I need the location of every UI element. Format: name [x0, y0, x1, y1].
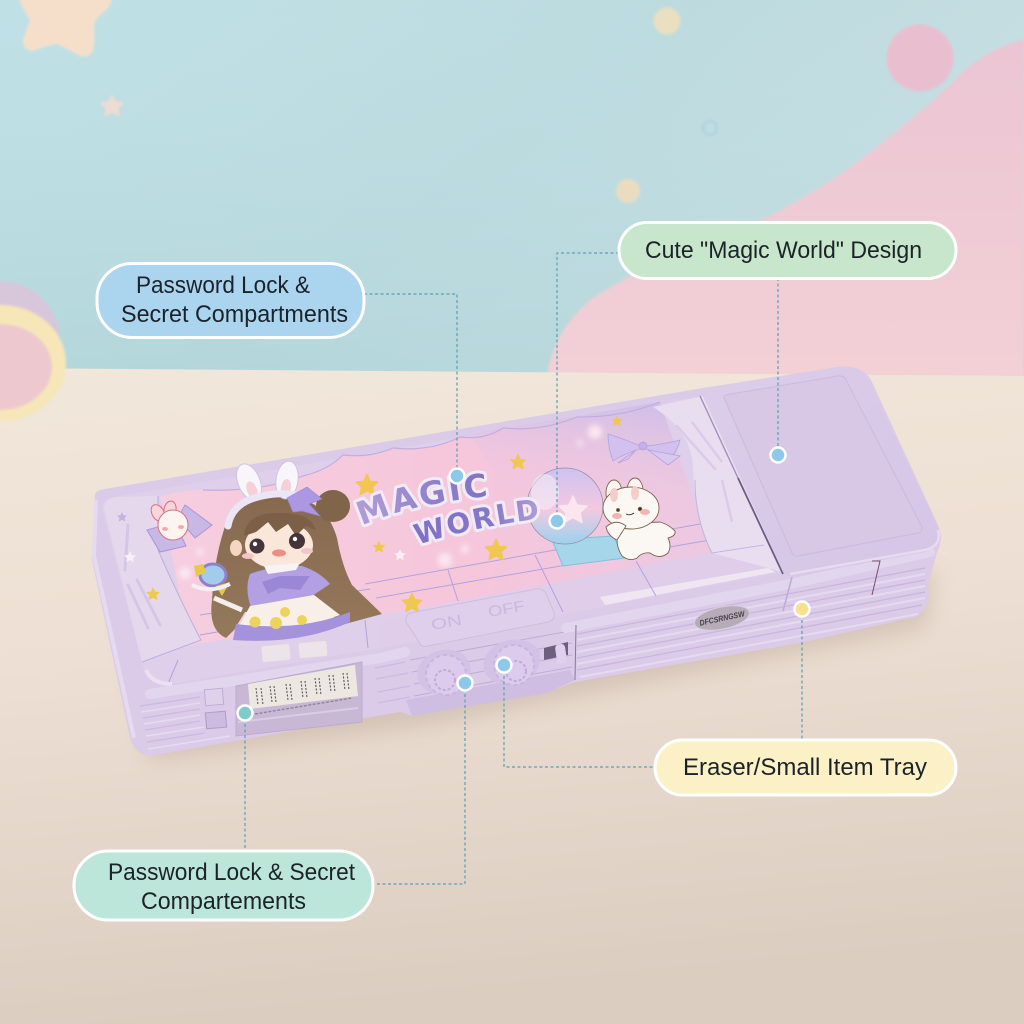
callout: eraser tray [655, 740, 956, 795]
left curtain [104, 496, 201, 662]
floor grid [168, 524, 710, 684]
hair [211, 497, 382, 638]
case body [92, 367, 941, 755]
brand badge [692, 601, 752, 635]
callout: password lock bottom [74, 851, 373, 920]
lower tray notch [406, 670, 575, 716]
on/off switch: OFF [487, 598, 526, 621]
pink scene [160, 402, 712, 645]
side ribs: right highlight [577, 574, 925, 677]
decoration: pink cylinder [886, 24, 954, 92]
rabbit [603, 478, 675, 560]
decoration: small star [102, 96, 122, 115]
callout: password lock top: Password Lock & [136, 272, 310, 299]
decoration: left cylinder [0, 281, 66, 421]
eraser lid rim highlight [790, 530, 939, 574]
background: table [0, 368, 1024, 1024]
eraser lid [703, 367, 939, 576]
callout: password lock bottom: Compartements [141, 888, 306, 915]
title: Magic World [353, 470, 540, 546]
eraser lid recess [724, 376, 922, 556]
brand badge: DFCSRNGSW [699, 609, 747, 628]
decoration: pink hill [547, 40, 1024, 376]
legs [261, 641, 328, 662]
callout: password lock bottom: Password Lock & Secret [108, 859, 355, 886]
on/off switch [406, 589, 554, 646]
side ribs: left [140, 662, 410, 742]
callout: magic world design: Cute "Magic World" Design [645, 237, 922, 264]
apron [238, 595, 340, 628]
decoration: large star [18, 0, 112, 57]
case shadow [120, 570, 935, 760]
title: Magic World: MAGIC [353, 470, 489, 528]
side ribs: middle [410, 631, 572, 696]
callout: password lock top [97, 264, 364, 338]
girl character [192, 460, 382, 662]
on/off switch: ON [430, 612, 463, 634]
hair bun [316, 490, 350, 522]
small slider pin [544, 642, 568, 660]
callout: magic world design [619, 222, 956, 278]
stars on lid [356, 416, 622, 612]
decoration: wall dots [616, 8, 717, 203]
lock knobs [412, 625, 576, 700]
headband [228, 494, 312, 526]
title: Magic World: WORLD [410, 497, 540, 546]
bokeh lights [179, 425, 602, 579]
side ribs: highlight left [141, 703, 230, 749]
front rim [150, 552, 930, 694]
marker dots [238, 448, 810, 720]
side ribs: right [577, 568, 925, 670]
lid divide shadow [700, 396, 783, 574]
bangs [244, 513, 316, 536]
callout leaders [245, 253, 802, 884]
lid base [102, 397, 783, 685]
bunny ears [232, 460, 301, 504]
lid corner highlight [146, 670, 172, 684]
right curtain [653, 396, 783, 572]
skirt [233, 612, 350, 641]
hair bow [287, 487, 322, 516]
side buttons [204, 688, 224, 706]
bow: right [608, 434, 680, 465]
blush and mouth [272, 549, 286, 557]
face [245, 521, 313, 569]
dress top [247, 566, 330, 610]
floor [380, 553, 783, 648]
small bunny and bow [147, 500, 212, 552]
tray seam lines [783, 561, 880, 611]
password digits [256, 673, 349, 705]
snow globe [527, 468, 625, 566]
wand [192, 564, 242, 610]
apron dots [250, 607, 307, 629]
eyes [250, 538, 264, 554]
left side highlight [94, 500, 134, 738]
lid artwork [104, 396, 780, 686]
knob right [478, 633, 546, 691]
pencil case [92, 366, 941, 756]
side ears [230, 540, 242, 556]
password panel [204, 662, 362, 736]
scallop line [203, 402, 660, 490]
floor highlight [600, 568, 775, 605]
callout: eraser tray: Eraser/Small Item Tray [683, 754, 927, 781]
callout: password lock top: Secret Compartments [121, 301, 348, 328]
knob left [412, 644, 476, 700]
background: wall [0, 0, 1024, 375]
